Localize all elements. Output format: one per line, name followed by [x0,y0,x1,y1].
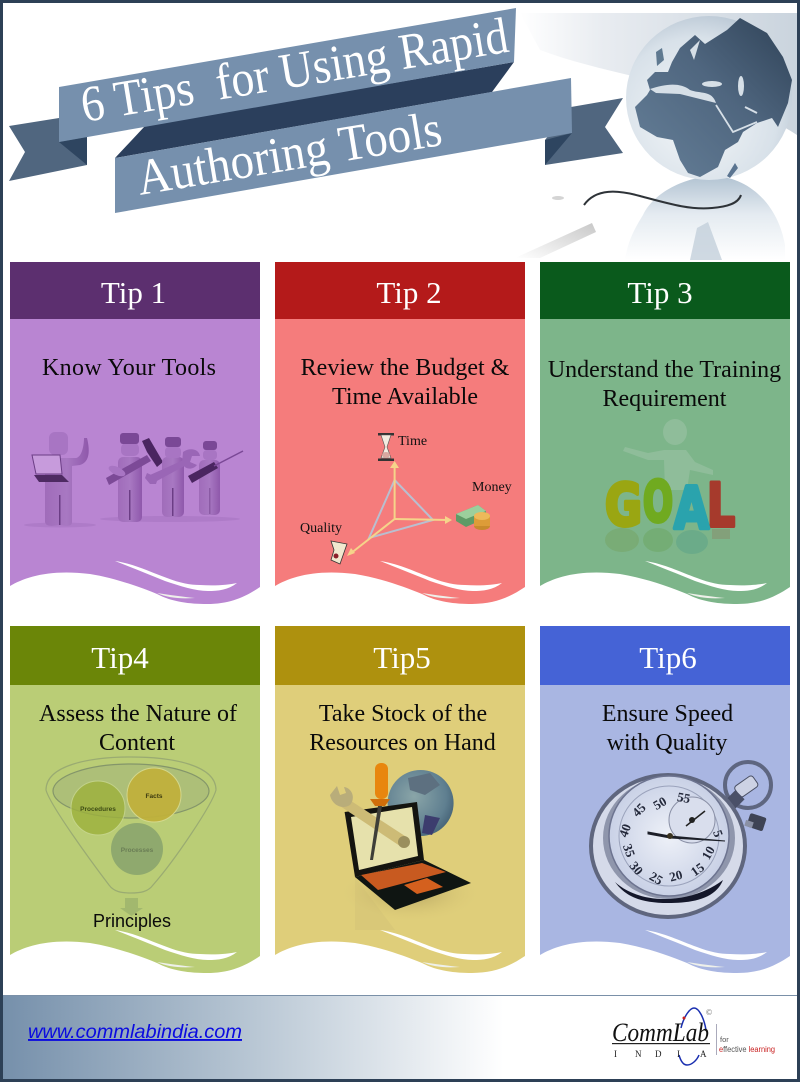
dial numbers [616,789,727,888]
arrow [120,898,143,916]
person [663,419,687,445]
ribbon lower band [115,78,572,213]
hands [648,832,725,841]
logo: for [720,1035,729,1044]
panel: tip 1 [10,262,260,604]
laptop base [355,860,471,910]
presenter figure [49,432,68,455]
worker figure 1 [118,457,142,522]
icon: laptop with tools and globe [330,763,482,930]
worker figure 2 [162,457,184,517]
label: money: Money [472,480,512,495]
panel: tip 4: Content [99,730,175,756]
tip 3 number: Tip 3 [627,275,693,310]
panel: tip 5 [275,626,525,973]
circle: processes [111,823,163,875]
logo: CommLab [612,1018,709,1047]
triangle [369,480,433,538]
dial numbers: 45 [629,800,649,820]
side knob [746,813,767,831]
funnel outline [46,757,216,893]
dial [609,776,729,896]
panel: tip 5: Resources on Hand [309,730,496,756]
tip 2 header [275,262,525,319]
logo: A [700,1049,707,1059]
dial numbers: 10 [698,843,718,862]
tip 5 number: Tip5 [373,640,431,675]
swoosh behind globe [520,13,797,135]
footer [3,995,797,1079]
goal letter G: G [605,471,642,539]
title line 1: 6 Tips for Using Rapid [77,8,512,134]
logo: I [614,1049,617,1059]
dial numbers: 5 [710,828,727,840]
circle: processes: Processes [121,847,154,854]
globe sphere [626,16,792,180]
right ribbon tail [545,98,623,165]
tip 6 heading: Ensure Speed [602,701,733,727]
panel: tip 3: Requirement [603,386,727,412]
stopwatch ring [725,762,771,808]
ribbon upper band [59,8,516,142]
icon: team with tools [24,432,243,528]
ribbon fold [115,62,514,158]
goal letter O: O [643,470,673,535]
circle: facts: Facts [146,793,163,800]
seas [650,85,716,103]
globe [388,770,454,836]
panel: tip 4 [10,626,260,973]
laptop screen [345,802,424,877]
tip 3 header [540,262,790,319]
reflection [605,528,730,554]
logo: I [677,1049,680,1059]
label: principles: Principles [93,911,171,931]
panel: tip 3 [540,262,790,604]
goal letter L: L [707,471,735,541]
header globe illustration [515,13,797,260]
tip 1 header [10,262,260,319]
label: time: Time [398,434,427,449]
globe continents [635,18,792,178]
dial numbers: 20 [668,867,684,885]
circle: procedures: Procedures [80,806,116,813]
logo [612,1008,775,1065]
chart: time money quality triangle [300,433,512,564]
icon: hourglass [378,433,394,461]
dial numbers: 55 [676,789,692,806]
tip 3 heading: Understand the Training [548,357,781,383]
website link: www.commlabindia.com [28,1022,242,1043]
panel: tip 6 [540,626,790,973]
case [591,775,745,917]
tip 4 header [10,626,260,685]
goal letter A: A [674,474,709,542]
tip 4 number: Tip4 [91,640,149,675]
left ribbon tail [9,118,87,181]
logo: N [635,1049,642,1059]
logo: effective learning [719,1045,775,1054]
logo: D [655,1049,662,1059]
panel: tip 6: with Quality [607,730,727,756]
icon: person with goal letters [605,419,735,554]
globe reflection [625,176,785,260]
shadow [355,877,395,930]
sub dial [669,797,715,843]
tip 2 heading: Review the Budget & [301,355,510,381]
wrench [330,786,410,848]
title ribbon [9,8,623,213]
tip 5 heading: Take Stock of the [319,701,487,727]
worker figure 3 [199,460,220,515]
dial numbers: 35 [620,842,639,860]
label: quality: Quality [300,521,342,536]
dial numbers: 30 [627,858,646,878]
panel: tip 2 [275,262,525,604]
circle: procedures [71,781,125,835]
logo: © [706,1008,712,1017]
tip 6 header [540,626,790,685]
tip 1 number: Tip 1 [101,275,166,310]
icon: stopwatch [591,762,771,917]
icon: scroll [331,541,347,564]
dial numbers: 25 [647,868,666,888]
dial numbers: 15 [688,859,707,879]
chart: funnel [46,757,216,931]
icon: money [456,505,490,530]
screwdriver [370,763,390,860]
dial numbers: 50 [650,793,669,813]
title line 2: Authoring Tools [133,101,446,207]
dial numbers: 40 [616,822,634,839]
tip 1 heading: Know Your Tools [42,355,216,381]
tip 5 header [275,626,525,685]
circle: facts [127,768,181,822]
tip 2 number: Tip 2 [376,275,442,310]
footer band [3,995,797,1079]
tip 6 number: Tip6 [639,640,697,675]
mouse shadow [515,223,596,258]
mouse cable [584,192,741,208]
tip 4 heading: Assess the Nature of [39,701,237,727]
panel: tip 2: Time Available [332,384,478,410]
